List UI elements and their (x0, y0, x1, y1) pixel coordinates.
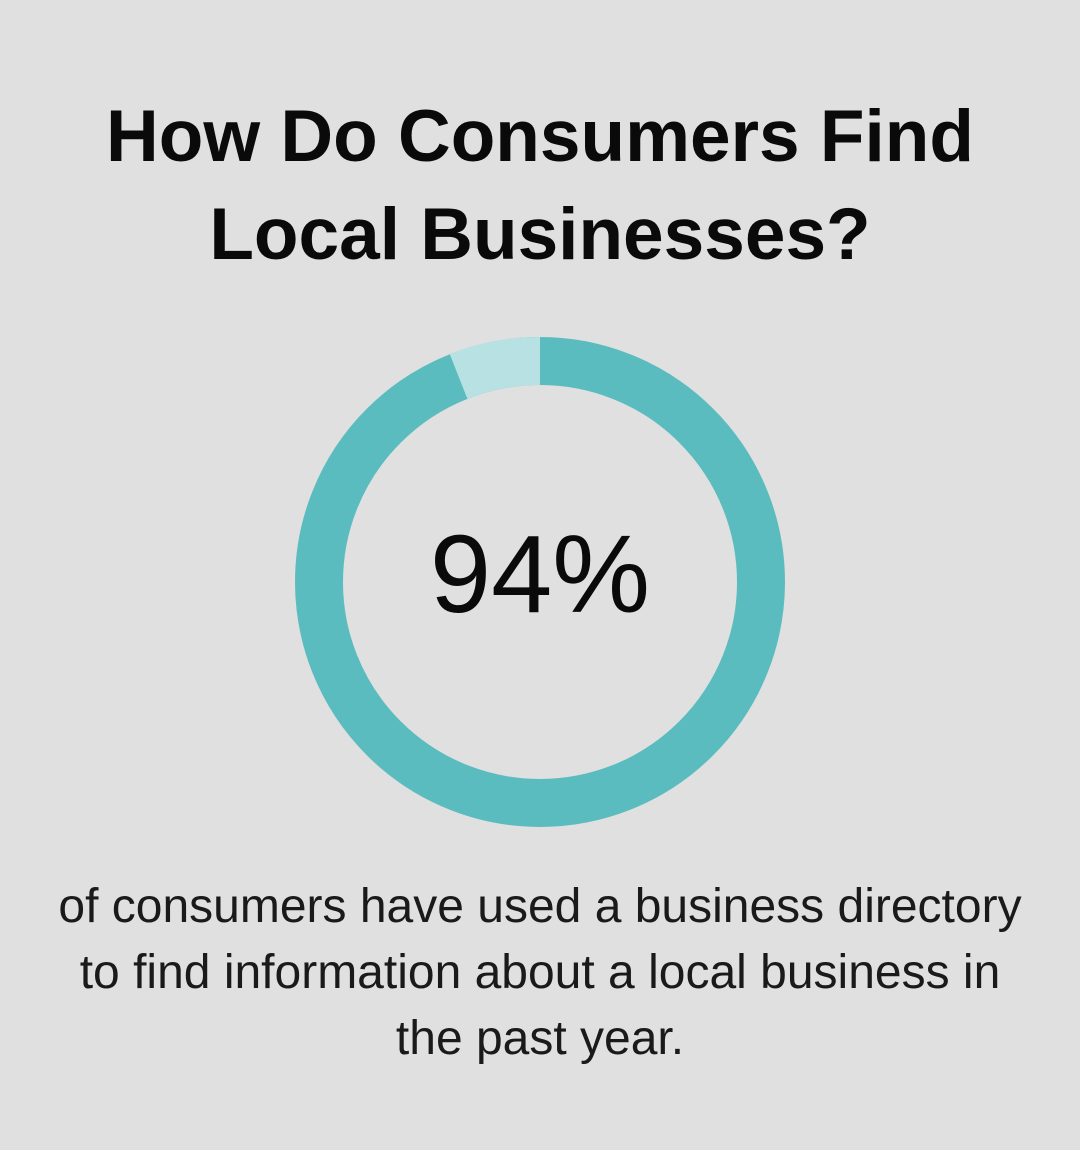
big percentage: 94% (430, 513, 650, 636)
ring: remaining segment 6% (459, 361, 540, 376)
description text (58, 880, 1022, 1065)
description text: the past year. (396, 1012, 684, 1065)
title: How Do Consumers Find (106, 96, 974, 177)
description text: of consumers have used a business directory (58, 880, 1022, 933)
title: Local Businesses? (209, 194, 871, 275)
ring: main segment 94% (319, 361, 761, 803)
title (106, 96, 974, 275)
description text: to find information about a local business in (80, 946, 1000, 999)
